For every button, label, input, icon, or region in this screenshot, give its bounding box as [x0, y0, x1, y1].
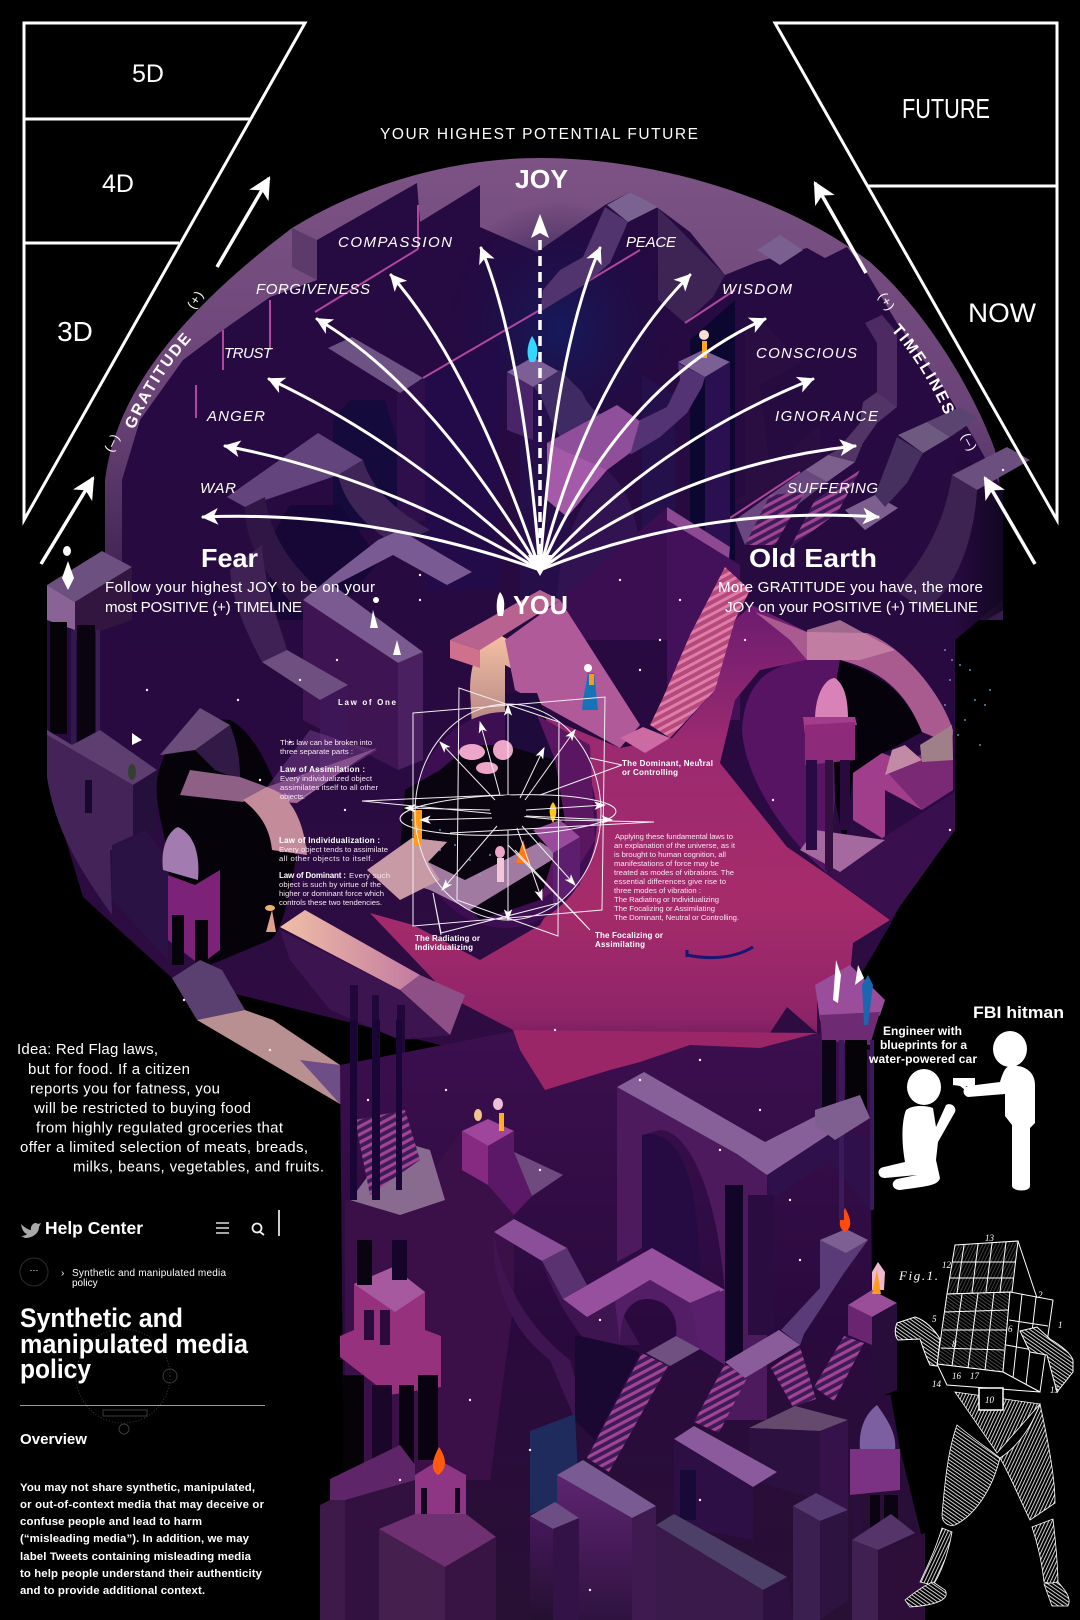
label: FORGIVENESS	[256, 281, 370, 298]
icon: search	[252, 1224, 264, 1235]
figure: YOU pilgrim	[497, 592, 504, 616]
figure: near you white	[370, 597, 401, 655]
left translucent bridges	[160, 708, 377, 855]
diagram label: focalizing: The Focalizing or	[595, 931, 663, 940]
lower-right arch and V bridge	[617, 1072, 870, 1420]
patent numerals: 16	[952, 1371, 962, 1381]
side arrows	[41, 178, 1035, 564]
body text: and to provide additional context.	[20, 1585, 205, 1597]
divider bar	[278, 1210, 280, 1236]
arms	[895, 1317, 1073, 1392]
diagram label: dominant: or Controlling	[622, 768, 678, 777]
figure: left walker	[265, 905, 276, 932]
bottom-centre magenta glow	[513, 1030, 817, 1090]
stars	[147, 470, 1003, 1590]
text: law of one left: object is such by virtue of the	[279, 880, 381, 889]
label: FUTURE: FUTURE	[902, 93, 990, 124]
text block: red flag idea: reports you for fatness, you	[30, 1080, 220, 1098]
arrow burst at YOU	[528, 555, 552, 576]
patent numerals: 10	[985, 1395, 994, 1405]
dome rim	[105, 158, 1003, 620]
right arc band	[755, 612, 953, 745]
text: law of one right: essential differences give rise to	[614, 877, 726, 886]
text: law of one right: The Dominant, Neutral or Controlling.	[614, 913, 739, 922]
heading: Old Earth	[749, 543, 877, 573]
black void right	[833, 660, 922, 850]
lower-left tower	[320, 1020, 563, 1620]
text: law of one left: Law of Dominant :	[279, 871, 346, 880]
text: law of one left: Every object tends to assimilate	[279, 845, 388, 854]
body text	[20, 1482, 265, 1597]
label: YOU: YOU	[513, 590, 568, 620]
lower body	[340, 1030, 925, 1620]
text: law of one left: higher or dominant force which	[279, 889, 384, 898]
patent numerals: 1	[1058, 1320, 1062, 1330]
faint diagram	[76, 1329, 177, 1434]
text: law of one right: three modes of vibration :	[614, 886, 701, 895]
engraving: patent man with cage	[895, 1233, 1073, 1607]
text block: red flag idea: offer a limited selection of meats, breads,	[20, 1139, 308, 1156]
arrows: fan from YOU	[203, 248, 878, 570]
diagram label: dominant	[622, 759, 713, 777]
label: WAR	[200, 480, 236, 497]
body text: confuse people and lead to harm	[20, 1516, 202, 1528]
curved label: timelines: TIMELINES	[894, 322, 954, 414]
text: law of one left: controls these two tendencies.	[279, 898, 382, 907]
title: policy	[20, 1354, 91, 1384]
peach arch pier	[470, 635, 560, 745]
text: law of one left: Every such	[349, 871, 390, 880]
timelines minus: (–)	[958, 430, 980, 454]
label: PEACE	[626, 234, 677, 251]
heading: Law of One	[338, 698, 397, 707]
figures	[62, 330, 873, 1131]
label: Engineer with	[883, 1024, 962, 1038]
title: Synthetic and	[20, 1303, 183, 1333]
figure: blue walker	[582, 664, 598, 710]
label: IGNORANCE	[775, 408, 879, 425]
figure: eye figures	[414, 802, 556, 882]
right dome tower	[803, 678, 857, 870]
patent numerals: 8	[952, 1339, 957, 1349]
figure: left plant	[128, 733, 142, 780]
text: law of one left: objects.	[280, 792, 305, 801]
left dome tower	[162, 827, 220, 965]
body text: (“misleading media”). In addition, we may	[20, 1533, 250, 1545]
upper walls	[270, 208, 835, 620]
text block: red flag idea	[17, 1041, 324, 1176]
label: ANGER	[206, 408, 265, 425]
top-left tower	[47, 551, 168, 960]
text: law of one left: Law of Assimilation :	[280, 765, 365, 774]
gratitude minus: (–)	[101, 431, 123, 454]
figure: right pair	[833, 960, 873, 1025]
label: WISDOM	[722, 281, 792, 298]
label: FBI hitman	[973, 1003, 1064, 1022]
text: law of one left: This law can be broken into	[280, 738, 372, 747]
dome interior with building skyline	[47, 183, 1003, 1065]
lower-right stairs and platforms	[656, 1208, 868, 1620]
right towers	[815, 965, 925, 1620]
overview heading: Overview	[20, 1432, 88, 1448]
patent numerals: 13	[985, 1233, 994, 1243]
diagram label: radiating: Individualizing	[415, 943, 473, 952]
patent numerals: 6	[1008, 1324, 1013, 1334]
lower-centre bridges	[493, 1219, 725, 1620]
emotion labels	[200, 234, 879, 497]
label: 4D: 4D	[102, 170, 134, 198]
diagram label: radiating: The Radiating or	[415, 934, 480, 943]
upper platforms and curved bridges	[227, 192, 1030, 780]
body text: or out-of-context media that may deceive or	[20, 1499, 265, 1511]
label: TRUST	[224, 345, 274, 362]
label: blueprints for a	[880, 1038, 967, 1052]
text: law of one right: Applying these fundamental laws to	[615, 832, 733, 841]
text: law of one left: all other objects to itself.	[279, 854, 373, 863]
text: law of one left	[279, 698, 397, 907]
icon: engineer	[878, 1069, 955, 1190]
diagram label: dominant: The Dominant, Neutral	[622, 759, 713, 768]
navy glow behind centre	[440, 200, 680, 460]
right arch interior	[742, 660, 840, 873]
torso scale armor	[955, 1392, 1040, 1453]
panel: future now ladder	[775, 23, 1057, 520]
arrow: dashed to JOY	[531, 214, 549, 570]
breadcrumb: policy	[72, 1278, 98, 1289]
text: law of one left: Every individualized object	[280, 774, 373, 783]
label: COMPASSION	[338, 234, 452, 251]
text block: red flag idea: Idea: Red Flag laws,	[17, 1041, 158, 1058]
text: law of one left: Law of Individualization :	[279, 836, 380, 845]
patent numerals: 14	[932, 1379, 942, 1389]
YOU walkway	[450, 590, 560, 650]
body: Follow your highest JOY to be on your	[105, 579, 375, 596]
right house	[800, 725, 955, 920]
figure: peach arch flowers	[459, 740, 513, 774]
text block: red flag idea: milks, beans, vegetables, and fruits.	[73, 1158, 324, 1176]
meme: FBI hitman	[868, 1003, 1064, 1190]
label: 3D: 3D	[57, 316, 93, 347]
patent numerals	[932, 1233, 1062, 1405]
text: law of one right: an explanation of the universe, as it	[614, 841, 736, 850]
breadcrumb: ›	[61, 1268, 64, 1279]
text: law of one right: is brought to human cognition, all	[614, 850, 726, 859]
icon: breadcrumb dots: ···	[30, 1265, 38, 1275]
text: law of one right: manifestations of force may be	[614, 859, 719, 868]
patent numerals: 5	[932, 1314, 937, 1324]
breadcrumb	[61, 1268, 226, 1289]
diagram label: focalizing: Assimilating	[595, 940, 645, 949]
peach walkway lower left	[172, 910, 465, 1125]
gratitude plus: (+)	[184, 287, 207, 312]
patent numerals: 12	[942, 1260, 952, 1270]
body: JOY on your POSITIVE (+) TIMELINE	[725, 599, 978, 616]
caption: Fig.1: Fig.1.	[898, 1268, 938, 1283]
big pink staircase	[650, 567, 750, 738]
figure: glowing blue	[528, 336, 537, 362]
label: NOW: NOW	[968, 298, 1037, 328]
text block: Old Earth	[718, 543, 983, 616]
label: SUFFERING	[787, 480, 878, 497]
body text: label Tweets containing misleading media	[20, 1551, 252, 1563]
text: law of one right	[614, 832, 739, 922]
diagram label: focalizing	[595, 931, 663, 949]
heading: Fear	[201, 543, 258, 573]
icon: breadcrumb dots	[20, 1258, 48, 1286]
icon: bird	[21, 1223, 41, 1238]
text: law of one left: three separate parts :	[280, 747, 353, 756]
label: 5D: 5D	[132, 60, 164, 88]
title	[20, 1303, 248, 1384]
heading: YOUR HIGHEST POTENTIAL FUTURE	[380, 126, 698, 143]
label	[868, 1024, 977, 1066]
text block: Fear	[105, 543, 375, 616]
title: manipulated media	[20, 1329, 248, 1359]
body: More GRATITUDE you have, the more	[718, 579, 983, 596]
right-side shadow	[955, 450, 1003, 640]
eye void	[367, 693, 597, 928]
patent numerals: 17	[970, 1371, 980, 1381]
body text: You may not share synthetic, manipulated,	[20, 1482, 255, 1494]
icon: menu	[216, 1223, 229, 1233]
central magenta mass	[370, 605, 890, 1090]
figure: white orange	[699, 330, 709, 358]
text: law of one right: treated as modes of vibrations. The	[614, 868, 734, 877]
panel: 5D 4D 3D ladder	[24, 23, 305, 520]
body: most POSITIVE (+) TIMELINE	[105, 599, 302, 616]
patent numerals: 15	[1050, 1385, 1060, 1395]
icon: hitman	[953, 1031, 1035, 1190]
blue sparkle stars right	[412, 650, 990, 875]
text block: red flag idea: will be restricted to buying food	[33, 1100, 251, 1117]
stray navy stroke	[687, 947, 753, 958]
heading: Help Center	[45, 1218, 143, 1238]
JOY heading: JOY	[515, 164, 568, 194]
cage	[937, 1241, 1053, 1392]
rule	[20, 1405, 265, 1406]
text block: red flag idea: but for food. If a citizen	[28, 1061, 190, 1078]
label: water-powered car	[868, 1052, 977, 1066]
text: law of one right: The Radiating or Individualizing	[614, 895, 719, 904]
pink seam lines	[196, 205, 800, 520]
text: law of one left: assimilates itself to all other	[280, 783, 378, 792]
body text: to help people understand their authenticity	[20, 1568, 263, 1580]
waist box	[979, 1388, 1003, 1410]
timelines plus: (+)	[875, 290, 898, 314]
panel: twitter help center	[20, 1210, 280, 1597]
diagram: law of one geometry	[362, 688, 654, 936]
figure: top-left white	[62, 546, 74, 590]
left void	[157, 719, 297, 965]
diagram label: radiating	[415, 934, 480, 952]
text: law of one right: The Focalizing or Assimilating	[614, 904, 715, 913]
breadcrumb: Synthetic and manipulated media	[72, 1268, 226, 1279]
curved label: gratitude: GRATITUDE	[126, 332, 192, 428]
figure: lower candles	[474, 1098, 504, 1131]
trousers and legs	[905, 1404, 1069, 1607]
text block: red flag idea: from highly regulated groceries that	[36, 1120, 284, 1136]
label: CONSCIOUS	[756, 345, 857, 362]
patent numerals: 2	[1038, 1290, 1043, 1300]
